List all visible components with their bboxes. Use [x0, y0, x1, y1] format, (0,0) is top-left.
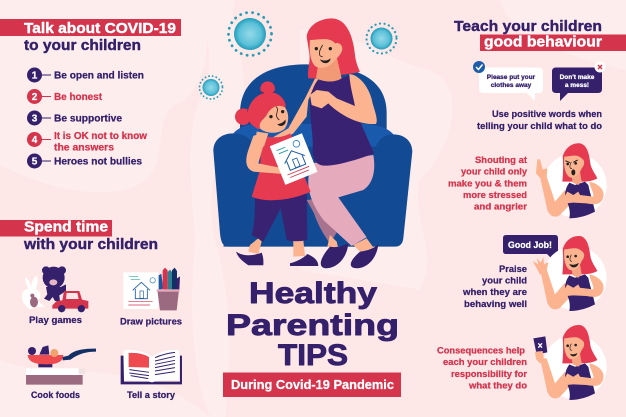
icon: happy mother waving: [533, 236, 607, 311]
text: shouting: your child only: [461, 166, 528, 178]
list item 3: [27, 110, 122, 126]
speech bubble: negative: a mess!: [565, 82, 589, 89]
text: shouting: more stressed: [463, 190, 527, 201]
text: consequences: what they do: [468, 380, 527, 392]
text: use positive words: Use positive words when: [492, 109, 602, 120]
speech bubble: positive: Please put your: [487, 74, 536, 81]
icon: virus right: [366, 24, 396, 54]
text: consequences: each your children: [443, 357, 527, 368]
icon: toys: [22, 266, 88, 312]
icon: angry mother pointing: [536, 143, 607, 218]
title: Parenting: [226, 309, 399, 342]
heading: teach your children: [454, 19, 626, 51]
heading: spend time: Spend time: [24, 220, 108, 236]
speech bubble: good job: [503, 235, 558, 262]
label: tell a story: Tell a story: [127, 390, 176, 401]
speech bubble: positive: [473, 61, 543, 101]
sofa: [213, 64, 412, 247]
heading: talk about covid-19: Talk about COVID-19: [24, 21, 176, 37]
text: consequences: responsibility for: [451, 369, 527, 380]
list item 2: [27, 89, 103, 104]
panel: spend time: [0, 220, 182, 401]
icon: drawing and crayons: [123, 268, 180, 310]
text: praise: [462, 264, 527, 310]
heading: teach your children: Teach your children: [454, 19, 602, 35]
subtitle banner: [223, 372, 401, 397]
speech bubble: negative: [552, 62, 606, 101]
list item 2: 2: [32, 92, 38, 103]
text: praise: your child: [482, 276, 527, 286]
panel: talk about covid-19: [0, 19, 181, 168]
text: praise: Praise: [499, 264, 527, 275]
panel: teach good behaviour: [437, 19, 626, 400]
icon: frying pan on stove: [26, 345, 96, 385]
label: draw pictures: Draw pictures: [120, 316, 182, 328]
list item 4: [27, 131, 147, 154]
speech bubble: positive: clothes away: [491, 82, 532, 89]
text: shouting: [448, 155, 528, 212]
mother: [252, 18, 378, 268]
list item 2: Be honest: [54, 92, 103, 103]
text: shouting: and angrier: [474, 202, 527, 212]
heading: talk about covid-19: [0, 19, 181, 54]
text: consequences: Consequences help: [437, 346, 525, 356]
heading: spend time: [0, 220, 158, 253]
icon: virus large: [228, 12, 272, 56]
icon: virus left: [200, 76, 222, 99]
speech bubble: negative: Don't make: [560, 74, 595, 81]
text: consequences: [437, 346, 527, 392]
heading: spend time: with your children: [23, 237, 158, 253]
label: play games: Play games: [29, 315, 82, 326]
list item 1: [27, 68, 144, 82]
list item 1: Be open and listen: [54, 70, 144, 82]
icon: mother holding card: [533, 325, 607, 400]
list item 5: Heroes not bullies: [54, 156, 142, 168]
list item 4: 4: [32, 135, 38, 146]
label: cook foods: Cook foods: [31, 390, 80, 401]
title: TIPS: [278, 339, 348, 372]
illustration: mother and child on sofa: [213, 18, 412, 268]
heading: teach your children: good behaviour: [484, 34, 602, 50]
list item 5: 5: [32, 156, 38, 168]
text: praise: behaving well: [464, 299, 527, 310]
list item 3: Be supportive: [54, 114, 122, 124]
text: praise: when they are: [462, 287, 527, 298]
text: use positive words: [477, 109, 602, 132]
title: Healthy: [249, 277, 377, 310]
speech bubble: good job: Good Job!: [508, 240, 552, 250]
title: [226, 277, 399, 372]
list item 4: It is OK not to know: [54, 131, 147, 142]
heading: talk about covid-19: to your children: [24, 38, 141, 54]
list item 4: the answers: [54, 142, 114, 154]
list item 5: [27, 154, 142, 168]
text: shouting: make you & them: [448, 178, 527, 190]
child: [235, 81, 318, 266]
text: shouting: Shouting at: [475, 155, 528, 166]
list item 3: 3: [32, 114, 38, 124]
icon: open book: [121, 350, 182, 384]
list item 1: 1: [32, 70, 38, 82]
subtitle banner: During Covid-19 Pandemic: [231, 378, 394, 392]
text: use positive words: telling your child what to do: [477, 121, 602, 132]
